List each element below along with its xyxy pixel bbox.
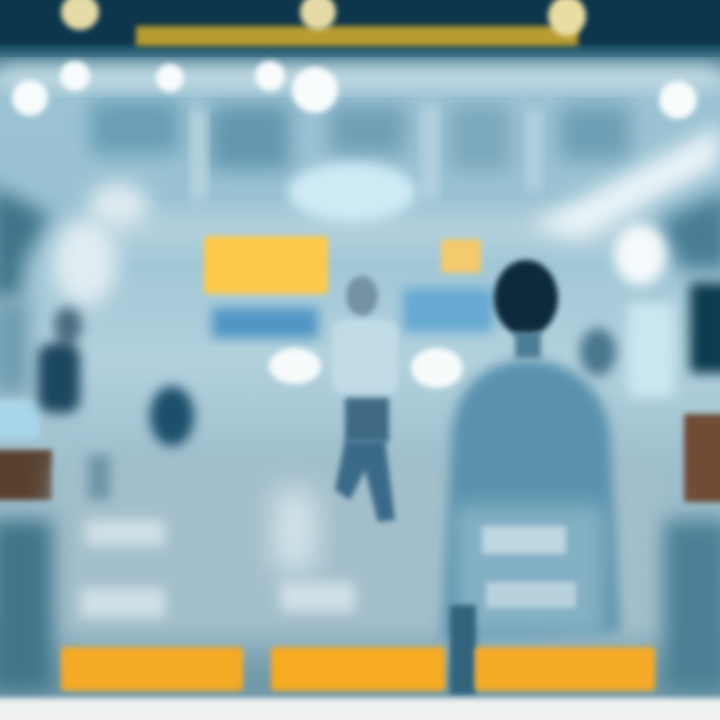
left dark wall — [0, 185, 50, 300]
ceiling structure — [0, 66, 720, 245]
right far dark edge — [690, 283, 720, 373]
left lower wall — [0, 300, 30, 395]
orange button left — [61, 647, 243, 691]
left brown box — [0, 450, 52, 500]
left upper glow — [88, 183, 148, 227]
bottom white strip — [0, 698, 720, 720]
person center — [332, 276, 398, 522]
person right-far — [580, 328, 616, 376]
small yellow panel — [441, 239, 481, 273]
person foreground — [442, 260, 620, 695]
right light panel — [628, 303, 674, 397]
orange button right — [475, 647, 655, 691]
diagonal light beam — [530, 125, 720, 240]
central sign — [288, 162, 416, 222]
right column glow — [614, 225, 666, 285]
lower glow spots — [269, 348, 463, 388]
floor — [0, 460, 720, 690]
title bar — [61, 0, 586, 46]
right dark wall — [660, 190, 720, 270]
yellow panel — [204, 236, 328, 294]
dark top band — [0, 0, 720, 46]
ceiling lights — [12, 61, 697, 119]
blue screen left — [212, 308, 318, 338]
blue screen right — [403, 288, 493, 332]
floor text blocks — [80, 520, 355, 618]
right brown box — [684, 414, 720, 502]
person left — [38, 307, 110, 500]
orange button center — [271, 647, 445, 691]
left blue block — [0, 400, 40, 438]
left column glow — [53, 218, 117, 306]
seated figure — [150, 386, 194, 446]
